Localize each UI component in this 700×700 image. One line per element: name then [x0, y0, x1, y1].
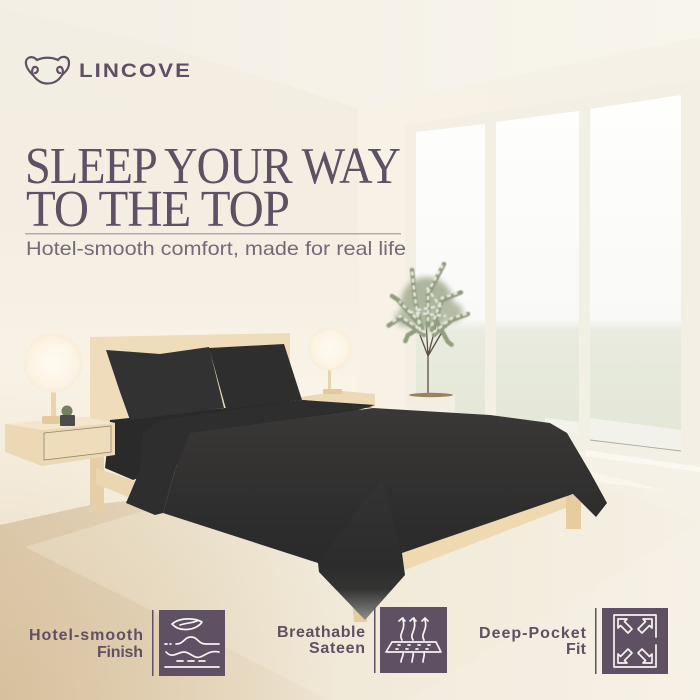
- bottom vignette: [0, 360, 340, 700]
- potted olive tree: [388, 264, 468, 414]
- title rule: [25, 233, 401, 234]
- feature: breathable sateen: [277, 607, 447, 673]
- wordmark: LINCOVE: [79, 60, 192, 82]
- feature: hotel-smooth finish: Finish: [97, 644, 143, 661]
- feature: deep-pocket fit: Deep-Pocket: [479, 625, 587, 642]
- rug: [25, 482, 700, 700]
- icon: leaf and layers: [165, 619, 219, 667]
- icon: expanding corners: [614, 615, 656, 667]
- duvet: [163, 408, 607, 563]
- duvet corner: [318, 480, 405, 620]
- feature: hotel-smooth finish: Hotel-smooth: [29, 627, 143, 644]
- title: [25, 138, 400, 238]
- pillows: [106, 344, 302, 420]
- icon: koala logo: [26, 57, 69, 84]
- feature: deep-pocket fit: Fit: [566, 641, 587, 658]
- feature: breathable sateen: Breathable: [277, 624, 365, 641]
- folded top sheet: [126, 400, 373, 515]
- right nightstand and lamp: [300, 328, 375, 407]
- icon: rising air through fabric: [386, 618, 441, 662]
- logo: [26, 57, 192, 84]
- window: [405, 80, 700, 472]
- title: SLEEP YOUR WAY: [25, 138, 400, 195]
- title: TO THE TOP: [26, 181, 289, 238]
- small plant: [60, 406, 75, 426]
- bed frame: [90, 440, 581, 622]
- subtitle: Hotel-smooth comfort, made for real life: [26, 238, 406, 260]
- sheet under the duvet: [105, 400, 375, 480]
- headboard: [90, 333, 300, 440]
- feature: deep-pocket fit: [479, 608, 668, 674]
- feature: breathable sateen: Sateen: [309, 640, 365, 657]
- feature: hotel-smooth finish: [29, 610, 225, 676]
- left table lamp: [24, 334, 82, 424]
- left nightstand: [5, 417, 115, 466]
